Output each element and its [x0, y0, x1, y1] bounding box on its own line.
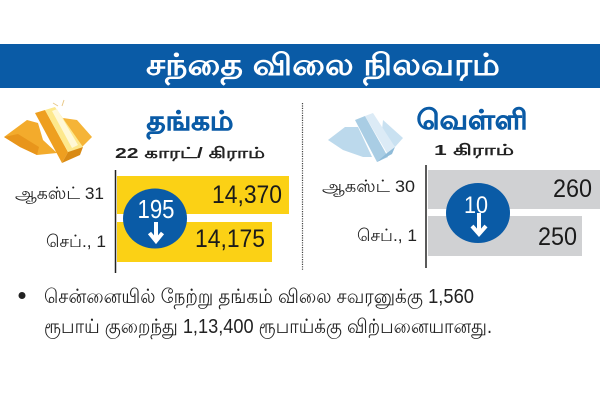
callout: gold drop 195: 195	[138, 194, 174, 224]
panel: silver	[322, 105, 600, 268]
label: August 30: ஆகஸ்ட் 30	[322, 177, 415, 196]
panel: gold	[4, 100, 289, 273]
heading: gold: தங்கம்	[146, 106, 234, 140]
bar: silver Sep 1	[428, 216, 582, 256]
title banner	[0, 44, 600, 88]
bar: silver Aug 30: 260	[553, 175, 592, 203]
title banner: சந்தை விலை நிலவரம்	[146, 49, 500, 86]
label: September 1: செப்., 1	[46, 232, 106, 251]
bar: silver Aug 30	[428, 170, 600, 209]
heading: silver: வெள்ளி	[416, 105, 528, 135]
bar: gold Sep 1: 14,175	[195, 225, 265, 253]
text block: note: சென்னையில் நேற்று தங்கம் விலை சவரனுக்கு 1,560	[44, 286, 474, 309]
callout: silver drop 10: 10	[464, 192, 488, 219]
text block: note	[18, 286, 492, 339]
label: September 1: செப்., 1	[357, 226, 417, 245]
bar: gold Sep 1	[117, 222, 272, 262]
bar: gold Aug 31: 14,370	[212, 181, 282, 209]
callout: silver drop 10	[446, 183, 510, 243]
bar: gold Aug 31	[117, 176, 289, 214]
callout: gold drop 195	[123, 188, 187, 248]
subheading: silver unit: 1 கிராம்	[434, 142, 514, 159]
label: August 31: ஆகஸ்ட் 31	[15, 184, 104, 203]
icon: silver bars	[328, 113, 403, 162]
bar: silver Sep 1: 250	[538, 223, 577, 251]
icon: gold bars	[4, 100, 92, 163]
text block: note: ரூபாய் குறைந்து 1,13,400 ரூபாய்க்கு விற்பனையானது.	[44, 316, 492, 339]
subheading: gold unit: 22 காரட்/ கிராம்	[115, 145, 265, 162]
